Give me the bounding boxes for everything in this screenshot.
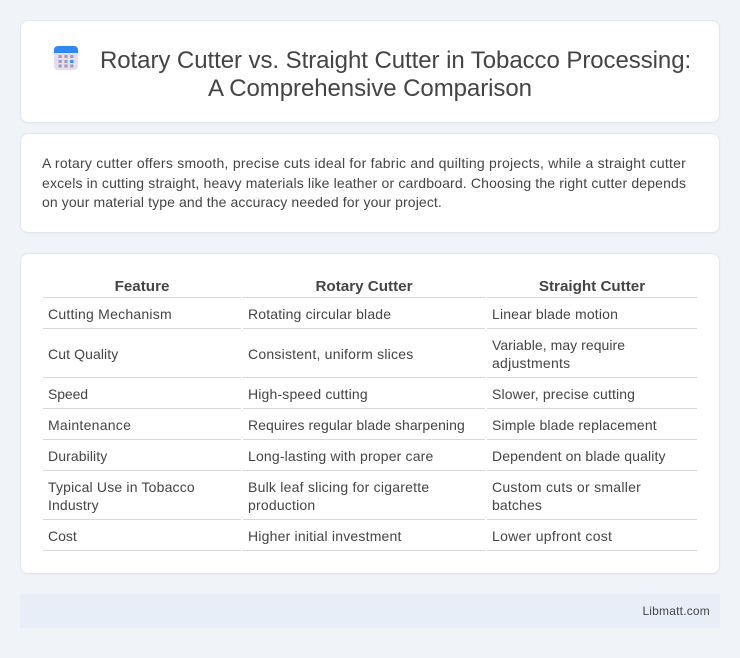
row: maintenance: Maintenance [48,417,131,433]
row: cutting mechanism: Cutting Mechanism [48,306,172,322]
row: typical use: production [248,497,315,513]
intro panel [20,133,720,233]
intro text: excels in cutting straight, heavy materials like leather or cardboard. Choosing the right cutter depends [42,175,686,191]
row: cut quality: Variable, may require [492,337,625,353]
row: cut quality: adjustments [492,355,570,371]
table header: Feature [115,278,169,295]
comparison table panel [20,253,720,574]
row: durability [43,448,697,471]
row: cost: Cost [48,528,77,544]
row: cutting mechanism: Rotating circular blade [248,306,391,322]
row: typical use [43,479,697,520]
row: typical use: Industry [48,497,99,513]
row: durability: Long-lasting with proper care [248,448,433,464]
row: typical use: Bulk leaf slicing for cigarette [248,479,429,495]
title: A Comprehensive Comparison [208,75,532,102]
footer credit: Libmatt.com [642,604,710,618]
row: maintenance: Requires regular blade sharpening [248,417,465,433]
intro text: A rotary cutter offers smooth, precise cuts ideal for fabric and quilting projects, while a straight cutter [42,155,686,171]
row: speed: Speed [48,386,88,402]
row: cutting mechanism: Linear blade motion [492,306,618,322]
row: durability: Durability [48,448,107,464]
row: durability: Dependent on blade quality [492,448,666,464]
footer bar [20,594,720,628]
row: typical use: batches [492,497,542,513]
row: cost [43,528,697,551]
table header: Rotary Cutter [315,278,413,295]
row: speed: High-speed cutting [248,386,368,402]
intro text: on your material type and the accuracy needed for your project. [42,194,442,210]
row: speed [43,386,697,409]
title: Rotary Cutter vs. Straight Cutter in Tobacco Processing: [100,47,691,74]
table header: Straight Cutter [539,278,645,295]
row: cut quality: Consistent, uniform slices [248,346,413,362]
row: maintenance [43,417,697,440]
intro text [42,155,686,210]
icon: calendar [54,46,78,70]
row: cutting mechanism [43,306,697,329]
row: cost: Lower upfront cost [492,528,612,544]
table header [43,278,697,298]
row: typical use: Typical Use in Tobacco [48,479,195,495]
title [100,47,691,102]
comparison table [43,278,697,551]
header panel [20,20,720,123]
row: maintenance: Simple blade replacement [492,417,657,433]
row: cut quality: Cut Quality [48,346,118,362]
row: speed: Slower, precise cutting [492,386,635,402]
row: cut quality [43,337,697,378]
row: typical use: Custom cuts or smaller [492,479,641,495]
row: cost: Higher initial investment [248,528,402,544]
